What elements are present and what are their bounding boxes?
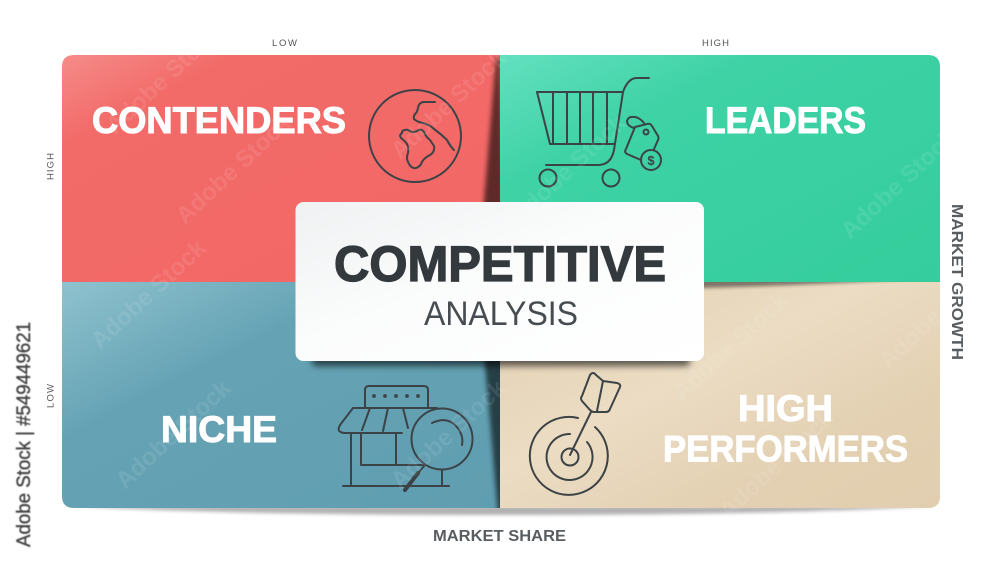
panel: contenders (62, 55, 506, 290)
watermarks: Adobe Stock (714, 404, 840, 524)
watermarks: Adobe Stock (171, 109, 297, 229)
panel: leaders (500, 55, 940, 282)
watermarks: Adobe Stock (836, 124, 962, 244)
watermarks: Adobe Stock (86, 234, 212, 354)
panel: high performers (500, 278, 940, 508)
watermarks: Adobe Stock (386, 374, 512, 494)
icon: shopping cart with price tag (537, 78, 661, 186)
icon: dart and target (530, 373, 620, 495)
watermarks: Adobe Stock (101, 19, 227, 139)
heading: high performers: HIGH (738, 388, 833, 429)
watermarks: Adobe Stock (874, 254, 1000, 374)
watermarks: Adobe Stock (506, 109, 632, 229)
icon: store with magnifying glass (339, 386, 472, 490)
title: COMPETITIVE (334, 236, 666, 292)
watermarks: Adobe Stock (386, 44, 512, 164)
icon: globe (369, 90, 461, 182)
icon: shopping cart with price tag: $ (647, 153, 655, 168)
y-axis title: MARKET GROWTH (948, 204, 965, 360)
watermarks: Adobe Stock (111, 374, 237, 494)
heading: high performers (663, 388, 908, 470)
stock image credit: Adobe Stock | #549449621 (14, 322, 35, 547)
x-axis low: LOW (272, 38, 297, 49)
matrix shadow (70, 506, 936, 515)
heading: high performers: PERFORMERS (663, 428, 908, 470)
panel: niche (62, 282, 506, 515)
y-axis low: LOW (46, 384, 56, 408)
watermarks: Adobe Stock (668, 286, 794, 406)
heading: contenders: CONTENDERS (92, 100, 346, 141)
subtitle: ANALYSIS (424, 295, 578, 333)
x-axis title: MARKET SHARE (433, 528, 566, 545)
center card (296, 202, 704, 366)
heading: leaders: LEADERS (705, 100, 866, 141)
y-axis high: HIGH (46, 153, 56, 180)
x-axis high: HIGH (702, 38, 729, 49)
heading: niche: NICHE (161, 409, 277, 450)
